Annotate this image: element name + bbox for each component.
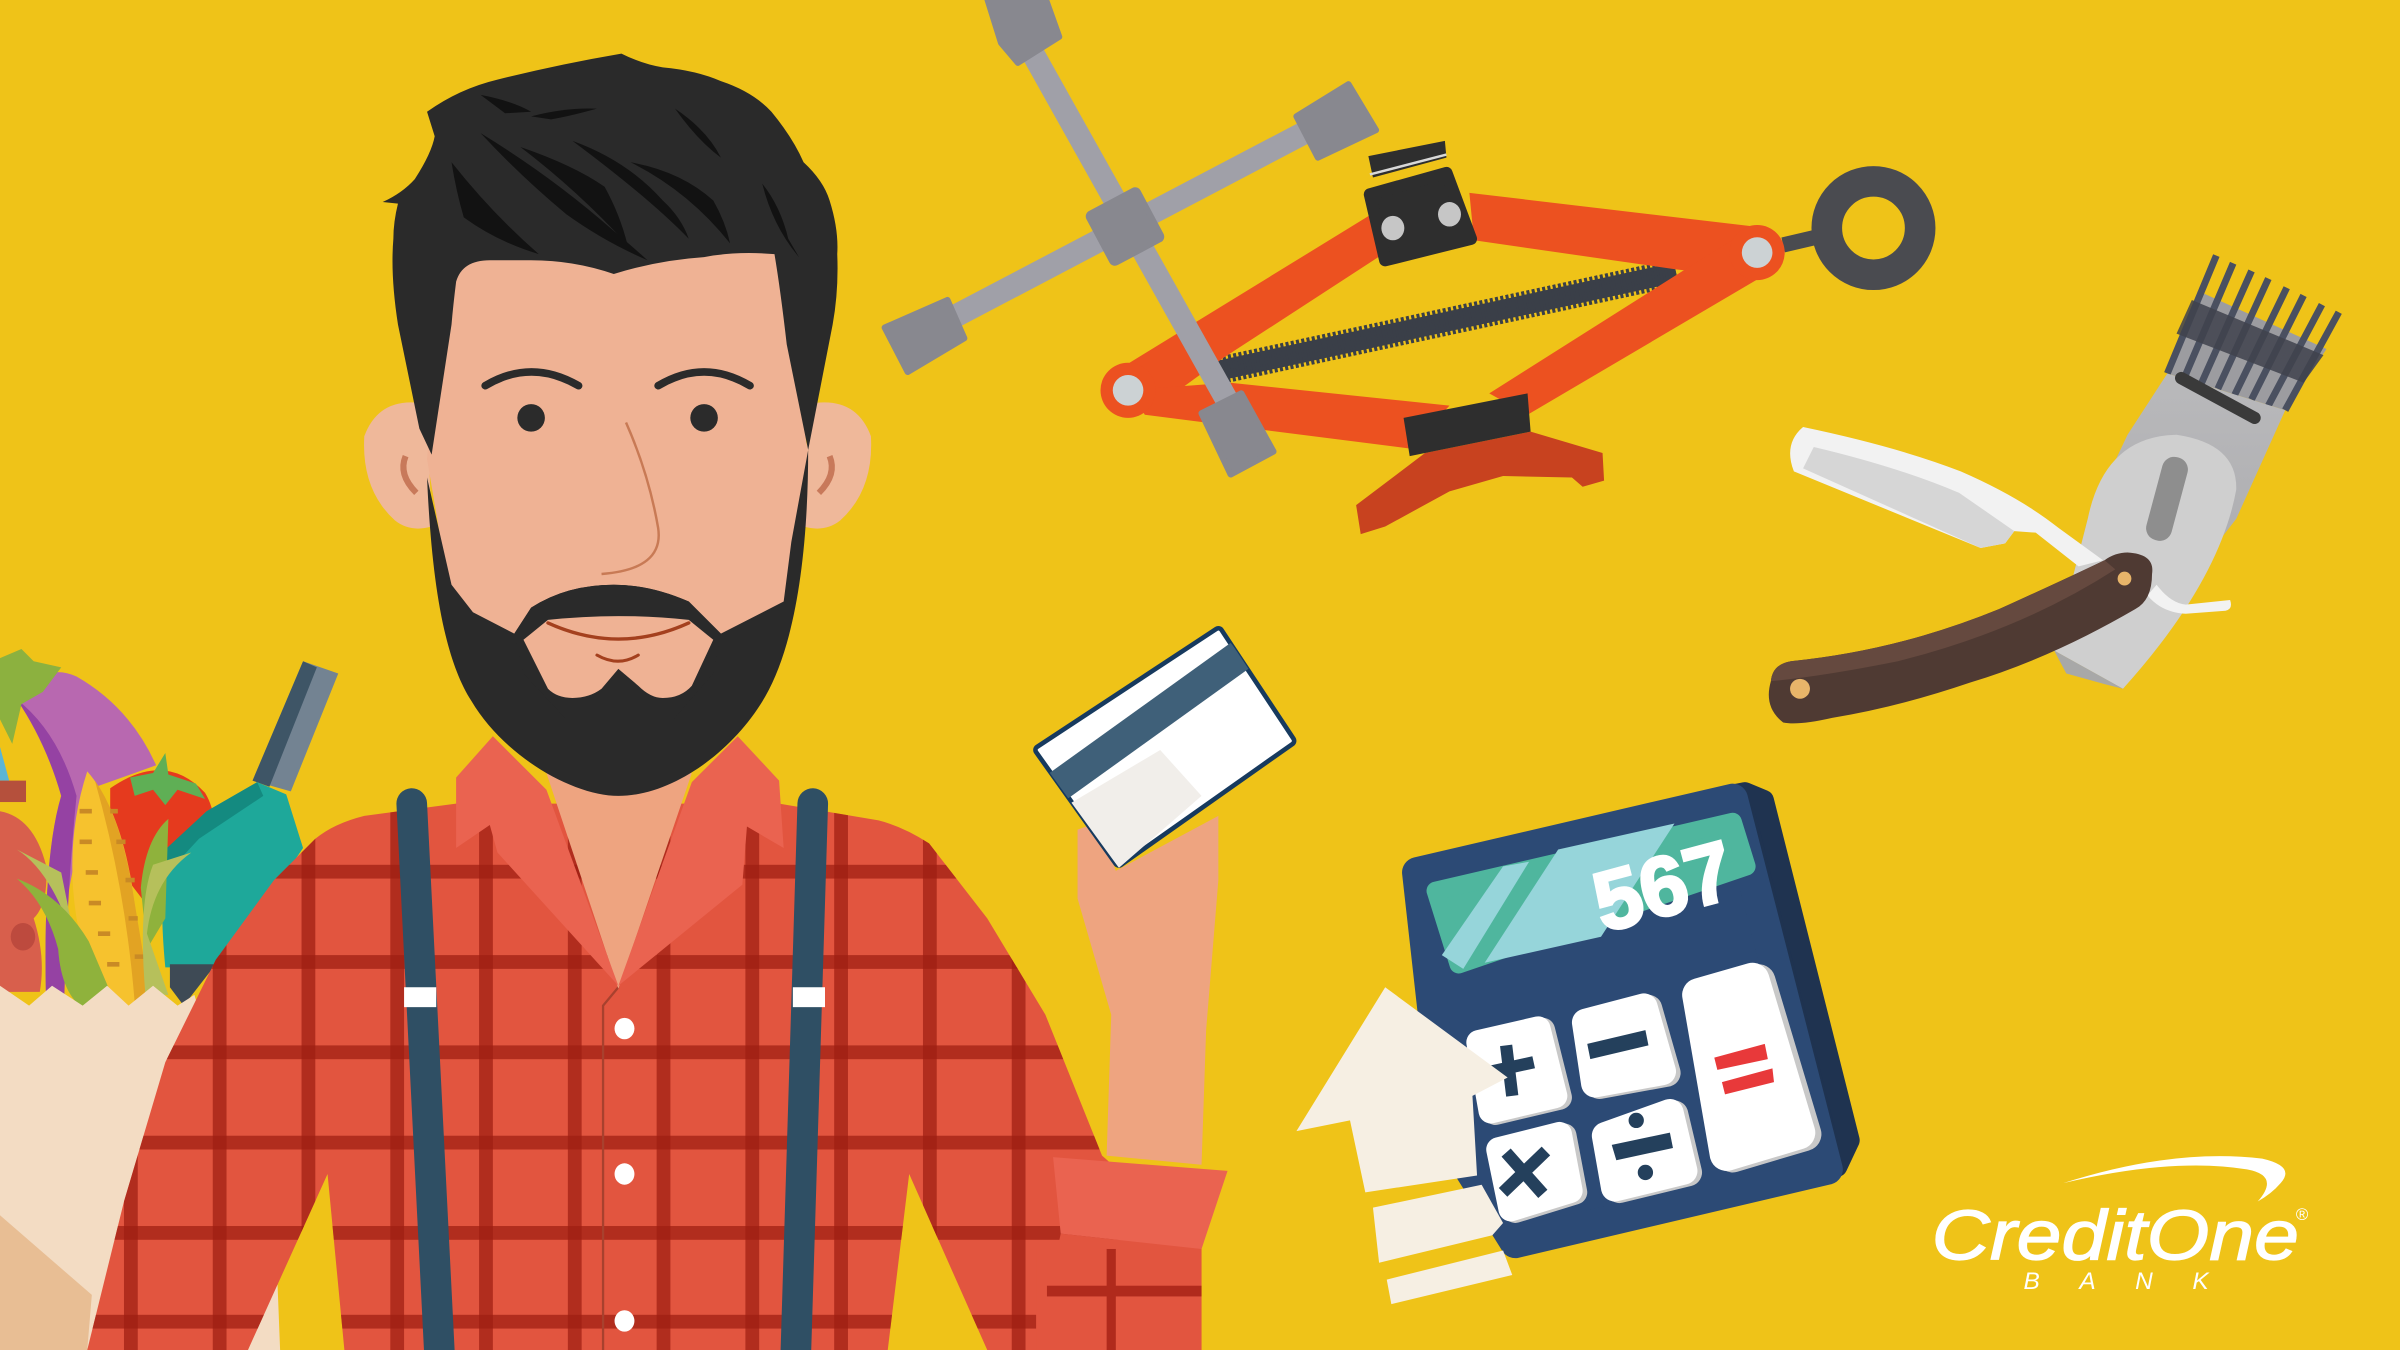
hair strands bbox=[452, 95, 799, 260]
equals key bbox=[1699, 980, 1805, 1156]
divide key bbox=[1606, 1113, 1688, 1189]
clipper switch bbox=[2143, 454, 2191, 544]
razor blade bbox=[1790, 427, 2103, 566]
grocery bag with food bbox=[0, 649, 338, 1350]
hair clipper bbox=[2054, 256, 2339, 689]
calculator display digits: 567 bbox=[1583, 823, 1743, 950]
wrench hub bbox=[1088, 189, 1162, 264]
logo wordmark: CreditOne bbox=[1932, 1196, 2299, 1275]
jack base bbox=[1356, 432, 1604, 534]
multiply key bbox=[1498, 1134, 1575, 1211]
mouth bbox=[548, 623, 689, 661]
clipper dark band bbox=[2177, 300, 2323, 383]
left suspender bbox=[404, 804, 439, 1350]
red fruit bbox=[0, 811, 46, 992]
eyes bbox=[517, 404, 718, 432]
card magnetic stripe bbox=[1050, 643, 1248, 798]
plus key bbox=[1479, 1029, 1560, 1113]
bag fold shadow bbox=[0, 1215, 92, 1350]
scissor car jack bbox=[1101, 141, 1920, 534]
clipper light panel bbox=[2054, 435, 2236, 689]
eyebrows bbox=[485, 372, 750, 386]
shirt bbox=[87, 804, 1228, 1350]
moustache and chin patch bbox=[514, 585, 721, 719]
jack screw bbox=[1220, 272, 1676, 370]
razor handle bbox=[1769, 553, 2152, 723]
jack bottom block bbox=[1404, 393, 1531, 456]
logo registered mark: ® bbox=[2296, 1205, 2309, 1224]
face bbox=[427, 245, 808, 719]
collar bbox=[456, 736, 784, 986]
paper bag bbox=[0, 986, 199, 1350]
clipper slit bbox=[2181, 378, 2255, 418]
card shading bbox=[1070, 750, 1202, 868]
clipper comb base bbox=[2167, 291, 2327, 410]
lug wrench bbox=[885, 0, 1376, 474]
neck bbox=[546, 773, 692, 989]
logo swoosh bbox=[2063, 1156, 2285, 1202]
upward arrow bbox=[1296, 987, 1512, 1304]
minus key bbox=[1586, 1007, 1667, 1085]
shirt buttons bbox=[615, 1018, 634, 1332]
placket line bbox=[603, 987, 618, 1350]
wrench sockets bbox=[885, 0, 1376, 474]
jack pivots bbox=[1101, 225, 1785, 418]
bottle bbox=[161, 661, 338, 1006]
calculator body bbox=[1417, 799, 1828, 1243]
right suspender bbox=[793, 804, 825, 1350]
straight razor bbox=[1769, 427, 2231, 723]
man in plaid shirt bbox=[0, 54, 1228, 1350]
razor tang bbox=[2147, 585, 2231, 614]
ears bbox=[364, 402, 871, 529]
wrench bars bbox=[931, 46, 1324, 429]
hair bbox=[383, 54, 838, 455]
sleeve lower plaid bbox=[1036, 1249, 1202, 1350]
plaid pattern bbox=[92, 812, 1114, 1350]
corn with husks bbox=[17, 771, 191, 1010]
rolled cuff bbox=[1053, 1157, 1228, 1249]
drink and lid bbox=[0, 747, 26, 802]
clipper body bbox=[2054, 373, 2285, 689]
calculator back edge bbox=[1500, 793, 1849, 1246]
eggplant bbox=[0, 649, 156, 998]
jack top block bbox=[1368, 141, 1471, 260]
razor pins bbox=[2118, 572, 2131, 585]
clipper teeth bbox=[2167, 256, 2339, 410]
bag sliver between arm and torso bbox=[248, 1272, 280, 1350]
beard bbox=[427, 450, 808, 796]
raised forearm and hand bbox=[1078, 816, 1218, 1165]
logo bank line: BANK bbox=[2023, 1268, 2210, 1295]
nose bbox=[602, 422, 659, 574]
Credit One Bank logo bbox=[1932, 1156, 2309, 1295]
credit card bbox=[1035, 632, 1290, 868]
calculator screen bbox=[1436, 822, 1746, 969]
jack arms bbox=[1128, 193, 1759, 448]
tomato bbox=[110, 753, 214, 903]
calculator bbox=[1417, 793, 1849, 1246]
jack handle ring bbox=[1783, 181, 1920, 275]
